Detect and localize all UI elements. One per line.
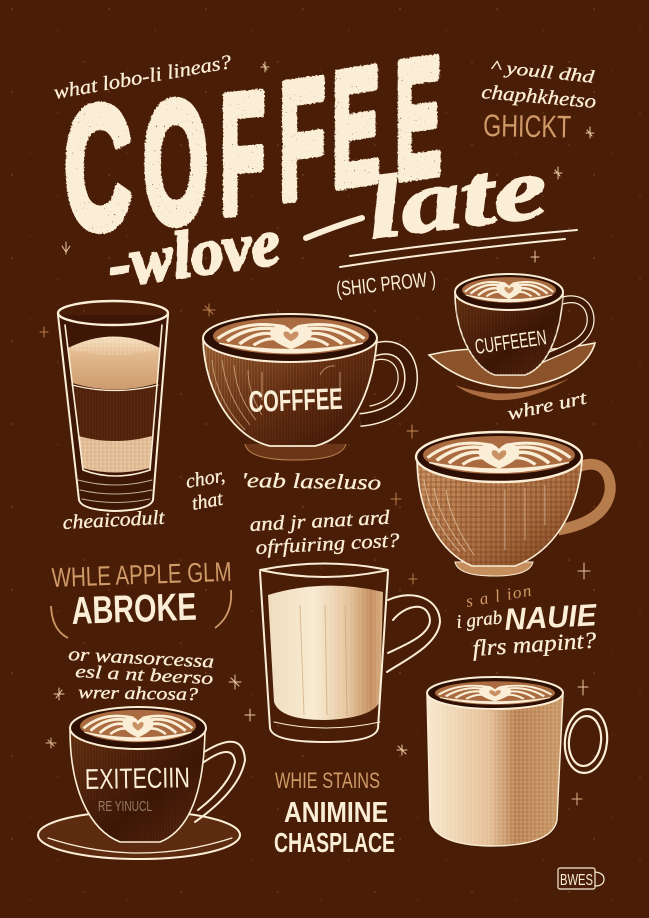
handle <box>562 707 610 775</box>
rim <box>427 677 563 709</box>
note: chor that: chor, <box>184 464 227 493</box>
handle <box>360 348 411 420</box>
icon: dark cup with saucer <box>38 707 245 859</box>
title: COFFEE: O <box>143 66 208 259</box>
icon: tall tan mug <box>427 677 610 846</box>
brackets <box>51 590 231 638</box>
rim <box>70 707 206 749</box>
coffee layer <box>72 385 158 441</box>
heading: animine: ANIMINE <box>284 796 388 829</box>
body <box>427 695 563 846</box>
latte art <box>80 710 196 742</box>
foot <box>455 562 533 576</box>
note: and jr anat ard: ofrfuiring cost? <box>255 529 400 559</box>
note: nauie: s a l ion <box>464 581 533 611</box>
rim <box>455 274 563 310</box>
handle <box>387 595 440 672</box>
milk <box>268 586 383 720</box>
underline strokes <box>340 230 577 267</box>
handle <box>540 299 591 360</box>
cup label: CUFFEEEN <box>473 325 548 359</box>
icon: large coffee cup <box>203 314 411 460</box>
note: script paragraph <box>68 644 215 704</box>
handle <box>195 742 245 822</box>
subtitle: love: -wlove <box>104 206 284 302</box>
title: COFFEE <box>64 23 442 265</box>
heading: nauie: NAUIE <box>504 598 599 637</box>
note: nauie: flrs mapint? <box>472 627 598 661</box>
milk layer <box>78 436 152 472</box>
heading: chasplace: CHASPLACE <box>274 828 395 859</box>
rim <box>416 432 582 482</box>
decorative stars <box>40 62 594 805</box>
body <box>455 295 563 375</box>
glass outline <box>58 301 168 511</box>
note: shic prow: (SHIC PROW ) <box>335 268 437 301</box>
title: COFFEE: F <box>279 42 325 236</box>
note: top left: what lobo-li lineas? <box>52 51 233 104</box>
note: whie stains <box>274 769 395 859</box>
note: and jr anat ard <box>249 507 400 559</box>
rim <box>203 314 377 362</box>
title: COFFEE: C <box>64 70 132 265</box>
subtitle dash <box>306 218 362 238</box>
note: top right: chaphkhetso <box>481 81 597 113</box>
note: chor that: that <box>190 488 225 515</box>
foam layer <box>68 336 160 390</box>
note: nauie <box>455 581 599 661</box>
note: script paragraph: wrer ahcosa? <box>78 682 198 704</box>
cup label: COFFFEE <box>248 381 343 419</box>
note: nauie: i grab <box>455 607 503 633</box>
latte art <box>462 277 556 303</box>
note: whie stains: WHIE STAINS <box>275 769 380 794</box>
label: cheaicodult: cheaicodult <box>62 507 166 534</box>
note: top right <box>481 56 597 144</box>
icon: tan latte cup <box>416 432 610 576</box>
title: COFFEE: E <box>395 23 442 215</box>
body <box>70 730 205 842</box>
note: script paragraph: esl a nt beerso <box>75 661 214 688</box>
logo stamp: BWES <box>560 871 593 889</box>
note: top right: ^ youll dhd <box>490 56 596 87</box>
hand shading <box>212 360 340 430</box>
saucer <box>38 811 240 859</box>
title: COFFEE: F <box>220 56 265 250</box>
glass outline <box>260 564 388 742</box>
cup sublabel: RE YINUCL <box>98 798 152 814</box>
icon: small cup with saucer <box>429 274 595 400</box>
subtitle: late: late <box>362 140 552 258</box>
heading: abroke: ABROKE <box>71 585 197 633</box>
saucer shadow <box>245 444 346 460</box>
note: chor that <box>184 464 227 515</box>
note: top right: GHICKT <box>483 108 571 144</box>
note: and jr anat ard: and jr anat ard <box>249 507 391 536</box>
latte art <box>435 681 555 705</box>
body <box>417 460 582 566</box>
hand shading <box>424 480 545 555</box>
body <box>203 340 377 446</box>
title: COFFEE: E <box>332 32 380 222</box>
note: whle apple: WHLE APPLE GLM <box>51 557 232 594</box>
handle <box>558 464 610 530</box>
note: whle apple <box>51 557 232 638</box>
label: whre urt: whre urt <box>506 388 589 425</box>
icon: layered latte glass <box>58 301 168 511</box>
note: script paragraph: or wansorcessa <box>68 644 215 673</box>
latte art <box>213 318 369 354</box>
note: eab laseluso: 'eab laseluso <box>241 468 381 494</box>
saucer <box>429 343 595 388</box>
cup label: EXITECIIN <box>85 763 190 796</box>
icon: glass milk mug <box>260 564 440 742</box>
latte art <box>423 436 575 474</box>
